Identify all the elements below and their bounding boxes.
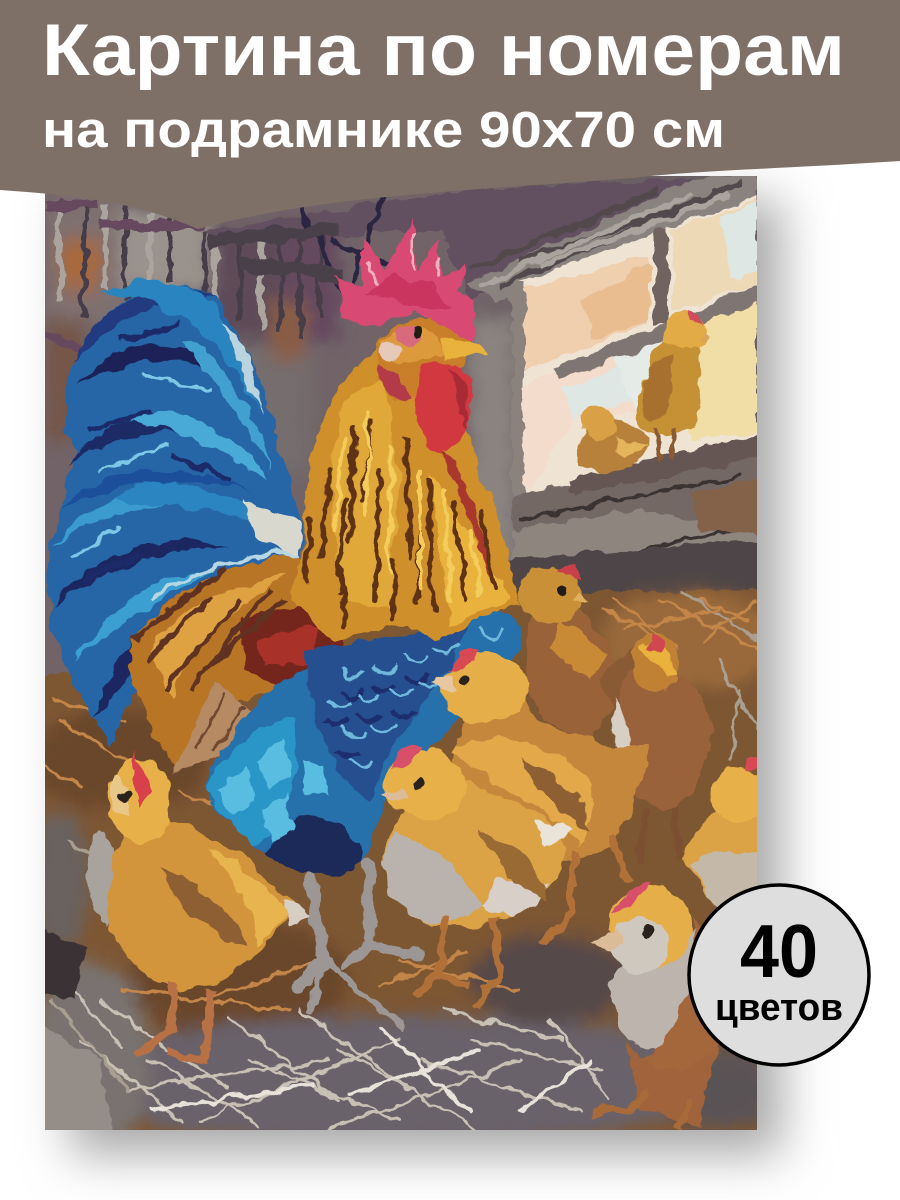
chick: on beam right (634, 310, 708, 462)
saddle feathers (128, 555, 345, 775)
chick: far right (682, 757, 757, 907)
rooster wattle (416, 361, 471, 452)
badge: 40 colours: 40 (740, 909, 818, 993)
straw floor (25, 590, 780, 1160)
rooster (47, 218, 523, 1028)
chick: brown right (611, 633, 715, 812)
canvas drop shadow (70, 200, 782, 1155)
roof beams (200, 176, 757, 300)
golden neck hackles (290, 342, 518, 640)
rooster tail (47, 281, 302, 745)
chick: small on beam (578, 407, 650, 472)
chick: centre grey belly (381, 744, 575, 1005)
rooster legs (300, 860, 420, 1028)
barn window (512, 195, 757, 497)
title: Картина по номерам (42, 10, 845, 91)
chick: left foreground (87, 750, 312, 1060)
rooster blue breast (205, 610, 523, 876)
chick: brown behind (518, 564, 635, 736)
barn wall (45, 194, 516, 561)
subtitle: на подрамнике 90x70 см (42, 101, 725, 158)
rooster comb (335, 218, 475, 340)
badge: 40 colours: цветов (715, 987, 843, 1029)
chick: yellow middle (430, 650, 650, 945)
painting: rooster and chicks (45, 176, 757, 1130)
rooster head (378, 319, 488, 402)
badge: 40 colours (689, 885, 869, 1065)
window ledge (508, 434, 757, 594)
banner background (0, 0, 900, 229)
chick: lower right (590, 882, 725, 1130)
